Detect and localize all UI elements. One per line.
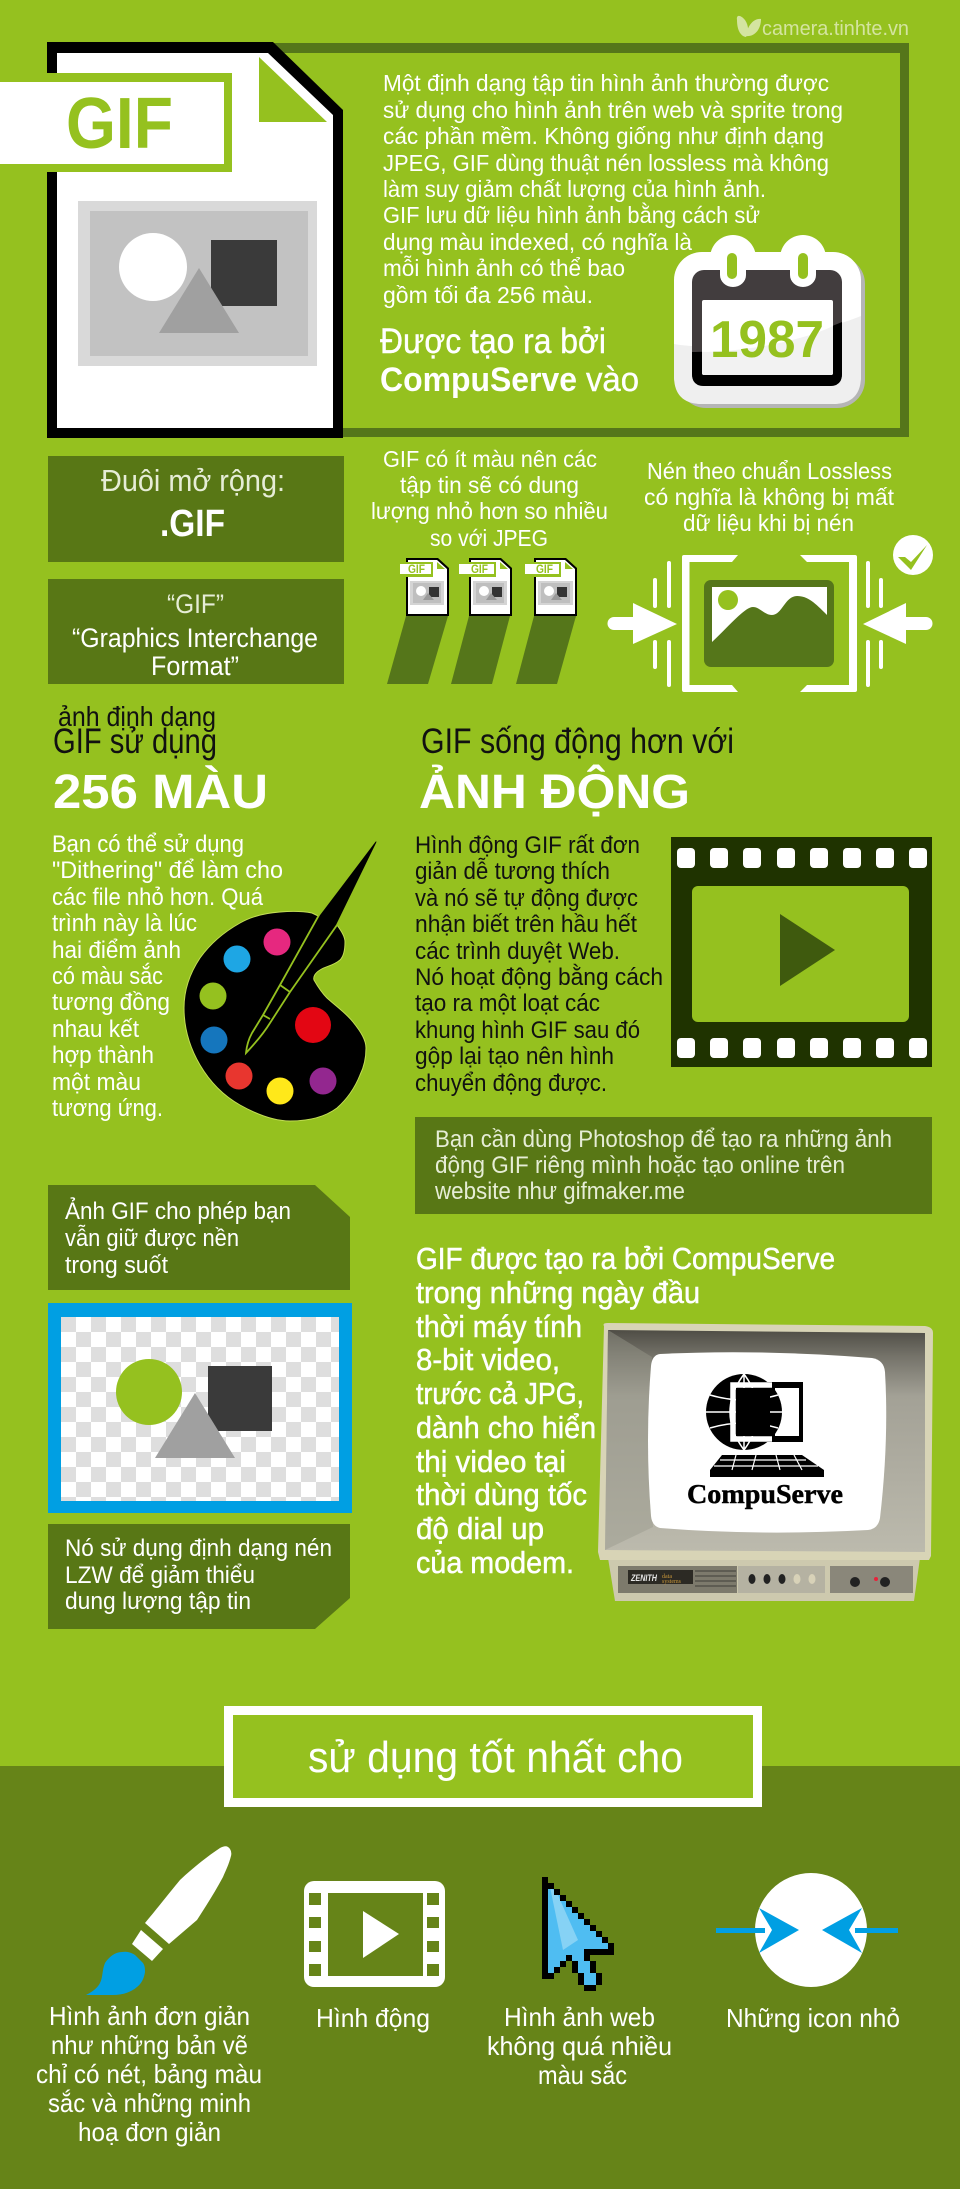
text: dithering: có màu sắc — [52, 963, 163, 990]
text: CompuServe history — [416, 1241, 835, 1580]
label: web images: không quá nhiều — [487, 2031, 672, 2061]
text: animation body: tạo ra một loạt các — [415, 990, 600, 1017]
icon: small file 2 — [451, 558, 512, 684]
text: animation body: chuyển động được. — [415, 1070, 607, 1097]
icon: lossless compression — [614, 535, 933, 692]
intro text block: dụng màu indexed, có nghĩa là — [383, 229, 692, 255]
text: animation body: các trình duyệt Web. — [415, 938, 620, 965]
text: animation body: Hình động GIF rất đơn — [415, 832, 640, 859]
panel: file extension — [48, 456, 344, 562]
text: CompuServe history: thời máy tính — [416, 1309, 582, 1344]
panel: transparency note: trong suốt — [65, 1252, 168, 1279]
text: animation body: gộp lại tạo nên hình — [415, 1043, 614, 1070]
text: dithering: các file nhỏ hơn. Quá — [52, 884, 264, 911]
label: simple images: như những bản vẽ — [51, 2030, 248, 2060]
text: animation body — [415, 832, 663, 1097]
text: dithering: hai điểm ảnh — [52, 937, 181, 964]
heading: best used for — [224, 1706, 762, 1807]
text: dithering — [52, 831, 283, 1122]
icon: transparent background image — [48, 1303, 352, 1513]
GIF banner label — [0, 73, 232, 172]
text: CompuServe history: của modem. — [416, 1545, 574, 1580]
intro text block: các phần mềm. Không giống như định dạng — [383, 123, 824, 149]
heading: animation: GIF sống động hơn với — [421, 722, 734, 761]
text: small file size — [371, 446, 608, 551]
text: CompuServe history: GIF được tạo ra bởi CompuServe — [416, 1241, 835, 1276]
icon: GIF file document — [47, 42, 343, 438]
panel: acronym: Format” — [151, 651, 239, 681]
panel: file extension: .GIF — [160, 503, 225, 545]
icon: CompuServe monitor: ZENITH — [630, 1573, 657, 1583]
icon: calendar 1987: 1987 — [710, 311, 824, 369]
heading: 256 colours: 256 MÀU — [53, 765, 268, 819]
text: small file size: lượng nhỏ hơn so nhiều — [371, 498, 608, 524]
text: lossless compression: Nén theo chuẩn Lossless — [647, 458, 892, 484]
panel: LZW note: LZW để giảm thiểu — [65, 1562, 255, 1589]
icon: small file 2: GIF — [471, 562, 488, 576]
panel: LZW note — [48, 1524, 350, 1629]
icon: small file 3: GIF — [536, 562, 553, 576]
label: simple images: Hình ảnh đơn giản — [49, 2001, 250, 2031]
heading: 256 colours: ảnh định dạng — [58, 701, 216, 732]
icon: small file 3 — [516, 558, 577, 684]
text: small file size: GIF có ít màu nên các — [383, 446, 597, 472]
label: simple images: chỉ có nét, bảng màu — [36, 2059, 262, 2089]
text: CompuServe history: 8-bit video, — [416, 1342, 560, 1377]
intro text block: JPEG, GIF dùng thuật nén lossless mà không — [383, 150, 829, 176]
panel: LZW note: Nó sử dụng định dạng nén — [65, 1535, 332, 1562]
panel: file extension: Đuôi mở rộng: — [101, 463, 285, 498]
intro text block: GIF lưu dữ liệu hình ảnh bằng cách sử — [383, 202, 760, 228]
created by text: CompuServe — [380, 361, 577, 399]
text: CompuServe history: trong những ngày đầu — [416, 1275, 700, 1310]
text: CompuServe history: thời dùng tốc — [416, 1477, 587, 1512]
panel: photoshop tip: động GIF riêng mình hoặc tạo online trên — [435, 1152, 845, 1179]
panel: transparency note — [48, 1185, 350, 1290]
text: dithering: Bạn có thể sử dụng — [52, 831, 244, 858]
created by text — [380, 322, 639, 399]
section background: best used for — [0, 1766, 960, 2189]
heading: 256 colours: GIF sử dụng — [53, 722, 217, 761]
icon: CompuServe monitor: data — [662, 1574, 672, 1580]
label: web images: màu sắc — [538, 2060, 627, 2090]
icon: small file 1: GIF — [408, 562, 425, 576]
icon: video frame — [304, 1881, 445, 1987]
icon: CompuServe monitor — [598, 1323, 933, 1601]
text: animation body: và nó sẽ tự động được — [415, 885, 638, 912]
heading: animation: ẢNH ĐỘNG — [419, 764, 690, 819]
icon: paint brush — [86, 1846, 231, 1995]
heading: 256 colours — [53, 701, 268, 819]
panel: photoshop tip — [415, 1117, 932, 1214]
panel: transparency note: Ảnh GIF cho phép bạn — [65, 1196, 291, 1225]
heading: animation — [419, 722, 734, 819]
intro text block: mỗi hình ảnh có thể bao — [383, 255, 625, 281]
intro text block: Một định dạng tập tin hình ảnh thường được — [383, 70, 829, 96]
text: lossless compression: có nghĩa là không bị mất — [644, 484, 894, 510]
intro text block: làm suy giảm chất lượng của hình ảnh. — [383, 176, 766, 202]
label: small icons: Những icon nhỏ — [726, 2003, 900, 2033]
text: lossless compression: dữ liệu khi bị nén — [683, 510, 854, 536]
text: animation body: nhận biết trên hầu hết — [415, 911, 637, 938]
text: lossless compression — [644, 458, 894, 536]
label: animation: Hình động — [316, 2003, 430, 2033]
watermark: camera.tinhte.vn — [762, 18, 909, 40]
text: small file size: tập tin sẽ có dung — [400, 472, 579, 498]
panel: acronym: “Graphics Interchange — [72, 623, 318, 653]
GIF banner label: GIF — [66, 84, 173, 164]
panel: photoshop tip: website như gifmaker.me — [434, 1178, 685, 1205]
icon: CompuServe monitor: systems — [662, 1579, 682, 1585]
intro text block: gồm tối đa 256 màu. — [383, 282, 593, 308]
intro text block: sử dụng cho hình ảnh trên web và sprite trong — [383, 97, 843, 123]
icon: small icons circle — [716, 1873, 898, 1987]
panel: transparency note: vẫn giữ được nền — [65, 1225, 239, 1252]
text: dithering: tương ứng. — [52, 1095, 163, 1122]
icon: calendar 1987 — [674, 235, 865, 408]
intro text block — [383, 70, 843, 308]
label: simple images: sắc và những minh — [48, 2088, 251, 2118]
icon: film strip — [671, 837, 932, 1067]
text: CompuServe history: trước cả JPG, — [416, 1376, 584, 1411]
panel: intro frame — [250, 43, 909, 437]
text: dithering: một màu — [52, 1069, 141, 1096]
label: simple images — [36, 2001, 262, 2147]
icon: paint palette — [184, 840, 377, 1121]
panel: acronym: “GIF” — [167, 589, 224, 619]
text: dithering: nhau kết — [52, 1016, 139, 1043]
panel: LZW note: dung lượng tập tin — [65, 1588, 251, 1615]
text: small file size: so với JPEG — [430, 525, 548, 551]
text: dithering: tương đồng — [52, 989, 170, 1016]
text: animation body: giản dễ tương thích — [415, 858, 610, 885]
text: CompuServe history: dành cho hiển — [416, 1410, 596, 1445]
heading: best used for: sử dụng tốt nhất cho — [308, 1733, 683, 1782]
panel: acronym — [48, 579, 344, 684]
created by text: Được tạo ra bởi — [380, 322, 606, 361]
text: CompuServe history: độ dial up — [416, 1511, 544, 1546]
icon: small file 1 — [387, 558, 449, 684]
panel: photoshop tip: Bạn cần dùng Photoshop để tạo ra những ảnh — [435, 1126, 892, 1153]
label: simple images: hoạ đơn giản — [78, 2117, 221, 2147]
text: dithering: hợp thành — [52, 1042, 154, 1069]
text: animation body: Nó hoạt động bằng cách — [415, 964, 663, 991]
label: web images — [487, 2002, 672, 2090]
text: dithering: trình này là lúc — [52, 910, 197, 937]
text: animation body: khung hình GIF sau đó — [415, 1017, 640, 1044]
text: CompuServe history: thị video tại — [416, 1444, 566, 1479]
icon: CompuServe monitor: CompuServe — [687, 1479, 843, 1509]
label: web images: Hình ảnh web — [504, 2002, 655, 2032]
text: dithering: "Dithering" để làm cho — [52, 857, 283, 884]
created by text: vào — [586, 361, 639, 399]
icon: pixel cursor — [542, 1877, 614, 1991]
